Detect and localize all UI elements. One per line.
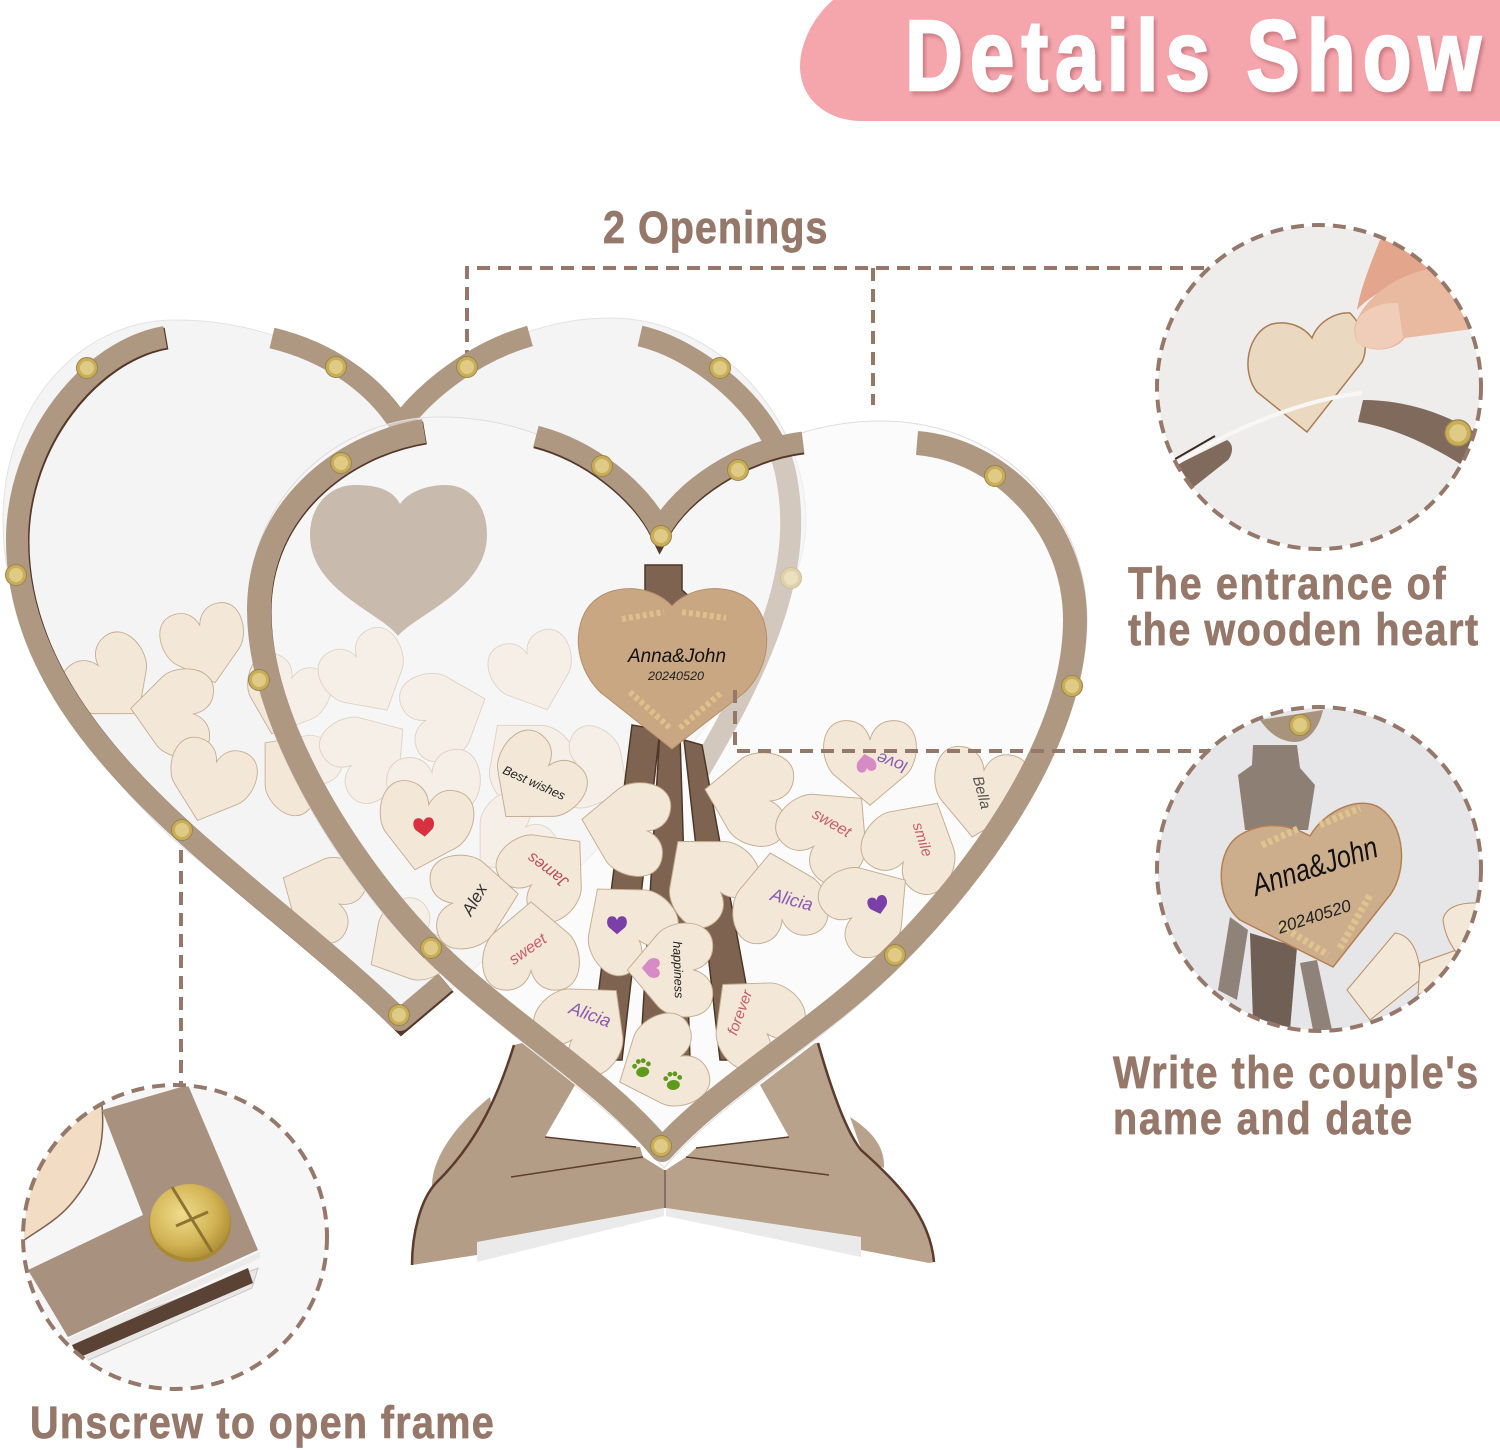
heart: happiness: happiness [670, 941, 686, 998]
rear lobes [432, 1097, 500, 1190]
front heart wooden hearts [369, 721, 1035, 1125]
stand base [412, 565, 934, 1265]
heart: red [369, 776, 479, 879]
callout lines for openings [467, 268, 1212, 405]
front heart screws [248, 452, 1082, 1156]
label: 2 Openings: 2 Openings [603, 203, 827, 253]
wood frame corner [28, 1085, 258, 1337]
lower acrylic [70, 1268, 258, 1363]
back heart frame centre [272, 336, 530, 425]
text: couple's name: name and date [1113, 1094, 1412, 1144]
easel top [640, 565, 693, 620]
heart: Alicia left: Alicia [566, 997, 614, 1031]
text: couple's name: Write the couple's [1113, 1048, 1478, 1098]
floor shadow [477, 1208, 861, 1262]
callout line: unscrew [179, 850, 183, 1085]
loose heart [24, 1106, 104, 1240]
heart: happiness [627, 923, 713, 1017]
large taupe heart [310, 485, 487, 636]
heart: love: love [874, 748, 910, 777]
back heart screws [6, 356, 802, 1026]
heart: Best wishes: Best wishes [501, 763, 567, 803]
lower wood layer [72, 1268, 253, 1358]
circle: nameplate detail [1155, 705, 1483, 1033]
callout line: name plate [735, 690, 1215, 751]
title: Details Show [905, 1, 1481, 112]
heart: James [487, 807, 611, 932]
screw [1445, 420, 1471, 446]
heart: Bella: Bella [969, 774, 994, 811]
fingers [1357, 240, 1430, 310]
heart: sweet right [766, 765, 895, 894]
heart: Alicia right [723, 845, 833, 947]
acrylic edge [1177, 393, 1362, 463]
back heart [3, 318, 806, 1035]
nameplate heart [578, 589, 767, 749]
stand right foot [666, 1043, 934, 1263]
text: unscrew: Unscrew to open frame [30, 1398, 494, 1448]
large name heart [1221, 803, 1401, 967]
front heart acrylic [248, 417, 1087, 1168]
back heart frame right [640, 336, 791, 770]
heart: Alex: Alex [458, 880, 491, 920]
front heart frame centre [536, 436, 803, 532]
heart: love [824, 721, 916, 805]
frame pieces [1358, 400, 1480, 465]
banner: Details Show [800, 0, 1500, 121]
screw [149, 1184, 231, 1262]
easel [1238, 745, 1315, 830]
heart: James: James [524, 849, 573, 891]
text: entrance: The entrance of [1128, 559, 1446, 609]
easel legs [590, 725, 760, 1060]
heart: Best wishes [470, 721, 597, 847]
heart: sweet left: sweet [506, 930, 550, 969]
back heart wooden hearts [53, 598, 649, 1001]
heart: smile [852, 779, 979, 903]
heart: forever: forever [724, 987, 757, 1038]
text: couple's name [1113, 1048, 1478, 1144]
loose hearts [1347, 933, 1420, 1020]
large name heart: Anna&John [1246, 829, 1382, 903]
heart: paw prints [601, 1005, 717, 1125]
heart: sweet left [483, 902, 579, 990]
text: entrance: the wooden heart [1128, 605, 1478, 655]
back heart acrylic [3, 318, 806, 1035]
nameplate heart: 20240520 [647, 669, 704, 683]
heart: Alicia right: Alicia [767, 884, 815, 915]
plain hearts [574, 743, 797, 937]
heart: smile: smile [909, 820, 936, 859]
text: entrance [1128, 559, 1478, 655]
heart: Alicia left [524, 959, 651, 1085]
heart: purple [561, 860, 688, 985]
back heart frame left [17, 337, 446, 1022]
large name heart: 20240520 [1274, 896, 1354, 938]
acrylic edge [65, 1252, 260, 1345]
circle: entrance detail [1150, 220, 1490, 560]
entrance wooden heart [1248, 313, 1365, 432]
heart: forever [688, 953, 815, 1079]
heart: sweet right: sweet [809, 806, 854, 841]
circle: screw detail [21, 1083, 329, 1391]
heart: Bella [925, 743, 1035, 845]
heart: purple right [810, 842, 932, 967]
stand left foot [412, 1043, 664, 1265]
small frame piece and screw [1260, 710, 1323, 742]
leaf decoration [622, 612, 726, 728]
nameplate heart: Anna&John [627, 646, 726, 667]
front heart frame outer [259, 431, 1075, 1150]
heart: Alex [427, 847, 525, 952]
